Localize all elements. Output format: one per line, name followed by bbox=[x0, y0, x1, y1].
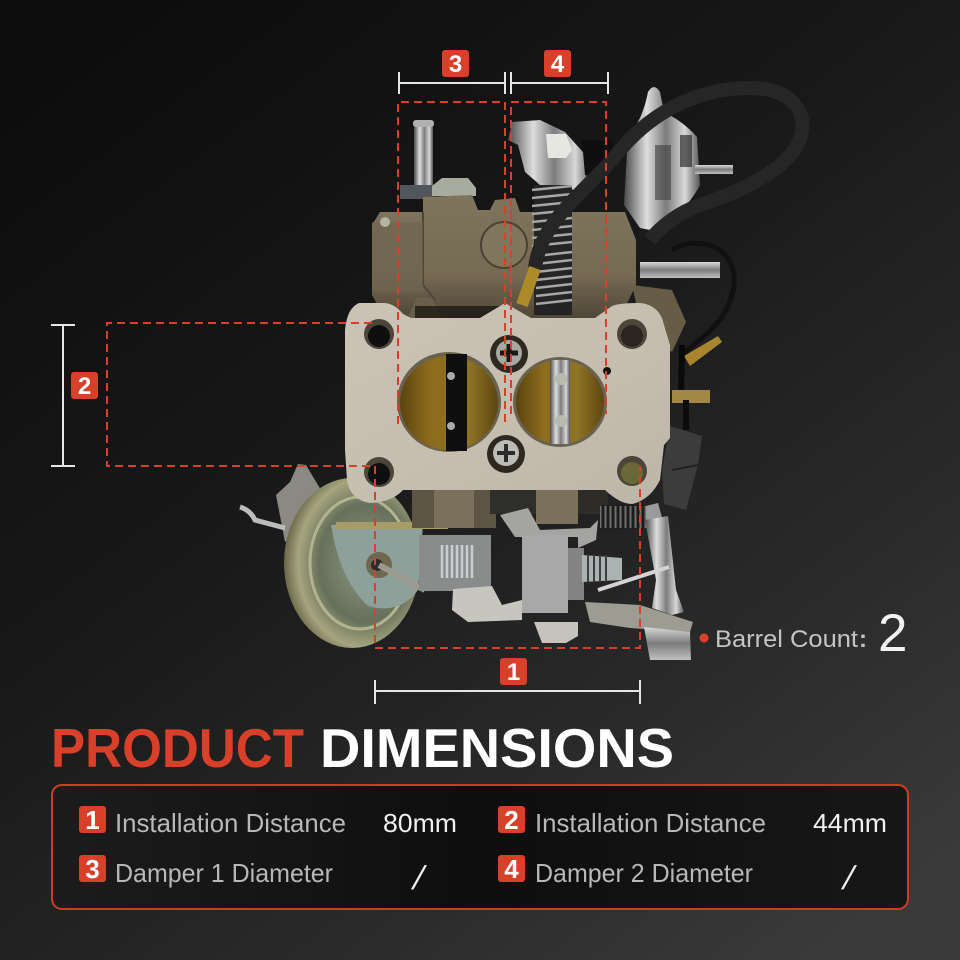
upper body casting bbox=[372, 195, 636, 318]
row: damper 2 diameter: Damper 2 Diameter bbox=[535, 858, 753, 888]
central block bbox=[522, 535, 568, 613]
zinc linkage pieces bbox=[419, 508, 693, 660]
row: installation distance 1: Installation Distance bbox=[115, 808, 346, 838]
dimension marker 2 bbox=[51, 325, 98, 466]
dimension marker 1 bbox=[375, 658, 640, 704]
dimension marker 3: 3 bbox=[449, 51, 462, 78]
right side body casting bbox=[632, 285, 686, 352]
dashed guide 1 bbox=[375, 466, 640, 648]
choke spring bbox=[532, 185, 572, 315]
barrel count callout: : bbox=[859, 626, 867, 653]
lower block bbox=[452, 586, 522, 622]
row: installation distance 2 bbox=[498, 805, 887, 838]
row: damper 2 diameter: / bbox=[839, 861, 859, 897]
row: installation distance 2: 44mm bbox=[813, 808, 887, 838]
mounting holes bbox=[364, 319, 647, 487]
row: installation distance 1 bbox=[79, 805, 457, 838]
link rod bbox=[598, 567, 669, 590]
dashed guide 2 bbox=[107, 323, 375, 466]
linkage and diaphragm assembly bbox=[240, 464, 693, 660]
row: damper 2 diameter: 4 bbox=[504, 854, 519, 884]
left barrel bbox=[397, 352, 501, 452]
dimension marker 3 bbox=[399, 50, 505, 94]
carburetor product illustration bbox=[240, 87, 802, 660]
row: damper 1 diameter: Damper 1 Diameter bbox=[115, 858, 333, 888]
panel: dimensions table bbox=[52, 785, 908, 909]
spring housing bbox=[419, 535, 491, 591]
dashed guide 4 bbox=[511, 102, 606, 414]
bottom nut bbox=[534, 622, 578, 643]
row: installation distance 2: Installation Distance bbox=[535, 808, 766, 838]
barrel count callout: 2 bbox=[878, 604, 907, 663]
right barrel bbox=[513, 357, 607, 447]
chrome choke bracket bbox=[488, 120, 618, 190]
upper arm bbox=[500, 508, 598, 548]
bottom screw bbox=[487, 435, 525, 473]
row: installation distance 2: 2 bbox=[504, 805, 519, 835]
barrel count callout bbox=[700, 604, 907, 663]
connector plug bbox=[662, 390, 710, 510]
return spring bbox=[600, 503, 664, 529]
row: damper 1 diameter: / bbox=[409, 861, 429, 897]
barrel count callout: Barrel Count bbox=[715, 626, 858, 653]
chrome lever arm bbox=[645, 516, 684, 615]
rear vacuum diaphragm bbox=[624, 87, 733, 232]
lower tab bbox=[644, 627, 691, 660]
fuel inlet pipe bbox=[400, 120, 434, 199]
title bbox=[51, 717, 674, 779]
main black hose bbox=[535, 88, 802, 268]
top screw bbox=[490, 335, 528, 373]
flange plate bbox=[345, 303, 670, 504]
title: PRODUCT bbox=[51, 717, 304, 779]
large diaphragm disc bbox=[284, 478, 448, 648]
small vacuum pod bbox=[240, 464, 321, 542]
dashed guide 3 bbox=[398, 102, 505, 424]
row: installation distance 1: 1 bbox=[85, 805, 100, 835]
dimension marker 4 bbox=[511, 50, 608, 94]
hex nut bbox=[432, 178, 476, 196]
dimension marker 4: 4 bbox=[551, 51, 565, 78]
side fitting and wire loop bbox=[640, 243, 734, 396]
row: damper 1 diameter: 3 bbox=[85, 854, 100, 884]
brass hose tip bbox=[522, 268, 535, 305]
lower arm plate bbox=[585, 602, 693, 632]
throttle stems bbox=[412, 488, 608, 528]
dimension marker 1: 1 bbox=[507, 659, 520, 686]
dimension marker 2: 2 bbox=[78, 373, 91, 400]
right coil bbox=[582, 555, 622, 582]
row: damper 1 diameter bbox=[79, 854, 429, 897]
row: damper 2 diameter bbox=[498, 854, 859, 897]
title: DIMENSIONS bbox=[320, 717, 674, 779]
row: installation distance 1: 80mm bbox=[383, 808, 457, 838]
